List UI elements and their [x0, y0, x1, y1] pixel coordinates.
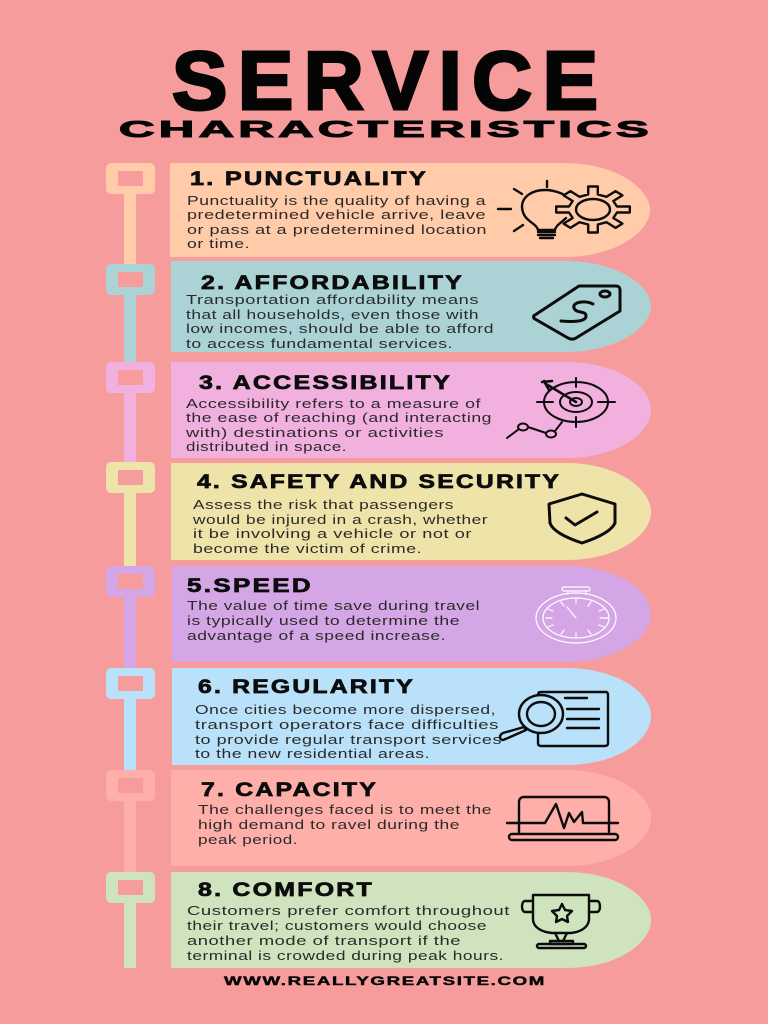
title [119, 34, 653, 142]
heading: safety and security: 4. SAFETY AND SECURITY [197, 472, 561, 493]
icon: target with arrow [507, 378, 615, 438]
text: safety and security: would be injured in a crash, whether [192, 512, 488, 527]
panel: accessibility [171, 362, 651, 458]
text: safety and security: it be involving a vehicle or not or [193, 526, 472, 541]
text: comfort: terminal is crowded during peak hours. [187, 948, 504, 963]
icon: shield with check [549, 494, 615, 543]
icon: document and magnifier [500, 692, 608, 746]
text: punctuality: predetermined vehicle arrive, leave [187, 207, 486, 222]
text: affordability: Transportation affordability means [186, 292, 479, 307]
icon: trophy [522, 895, 600, 948]
text: comfort [187, 903, 510, 963]
text: speed: The value of time save during travel [187, 598, 480, 613]
text: punctuality: or time. [187, 236, 250, 251]
panel: speed [172, 566, 651, 662]
text: capacity: high demand to ravel during the [198, 817, 460, 832]
text: accessibility [185, 396, 492, 454]
text: comfort: their travel; customers would choose [187, 918, 487, 933]
text: capacity [198, 802, 492, 847]
heading: affordability: 2. AFFORDABILITY [201, 273, 464, 294]
text: regularity: Once cities become more dispersed, [195, 702, 496, 717]
heading: accessibility: 3. ACCESSIBILITY [199, 373, 452, 394]
footer url: WWW.REALLYGREATSITE.COM [224, 976, 546, 988]
text: affordability: that all households, even those with [186, 307, 479, 322]
heading: comfort: 8. COMFORT [198, 880, 374, 901]
text: accessibility: Accessibility refers to a measure of [186, 396, 481, 411]
panel: comfort [171, 872, 651, 968]
panel: safety and security [171, 463, 651, 560]
text: regularity: to provide regular transport services [195, 732, 502, 747]
text: accessibility: the ease of reaching (and interacting [186, 410, 492, 425]
text: regularity [195, 702, 502, 761]
panel: regularity [172, 668, 651, 765]
title: SERVICE [172, 34, 598, 127]
text: safety and security: become the victim of crime. [193, 541, 422, 556]
text: regularity: transport operators face difficulties [195, 717, 499, 732]
text: accessibility: with) destinations or activities [185, 425, 444, 440]
text: affordability: low incomes, should be able to afford [186, 321, 494, 336]
text: regularity: to the new residential areas. [195, 746, 430, 761]
panel: affordability [171, 261, 651, 352]
text: affordability: to access fundamental services. [186, 336, 453, 351]
text: accessibility: distributed in space. [186, 439, 347, 454]
heading: capacity: 7. CAPACITY [201, 780, 378, 801]
timeline [106, 163, 155, 968]
panel: punctuality [170, 163, 650, 257]
text: comfort: Customers prefer comfort throughout [187, 903, 510, 918]
panel: capacity [171, 770, 651, 866]
text: safety and security [192, 497, 488, 556]
heading: regularity: 6. REGULARITY [198, 677, 415, 698]
text: capacity: peak period. [198, 832, 298, 847]
text: capacity: The challenges faced is to meet the [198, 802, 492, 817]
text: speed: is typically used to determine the [187, 613, 460, 628]
icon: light bulb and gear [498, 181, 630, 238]
text: punctuality [187, 193, 487, 251]
icon: price tag [534, 286, 620, 339]
heading: speed: 5.SPEED [187, 576, 313, 597]
title: CHARACTERISTICS [119, 116, 653, 142]
heading: punctuality: 1. PUNCTUALITY [190, 169, 428, 190]
icon: laptop with pulse [507, 797, 618, 840]
icon: stopwatch [536, 587, 616, 643]
text: safety and security: Assess the risk that passengers [193, 497, 454, 512]
text: comfort: another mode of transport if the [187, 933, 461, 948]
text: speed: advantage of a speed increase. [187, 628, 446, 643]
text: punctuality: Punctuality is the quality of having a [187, 193, 486, 208]
text: punctuality: or pass at a predetermined location [187, 222, 487, 237]
text: speed [187, 598, 480, 643]
text: affordability [186, 292, 494, 351]
